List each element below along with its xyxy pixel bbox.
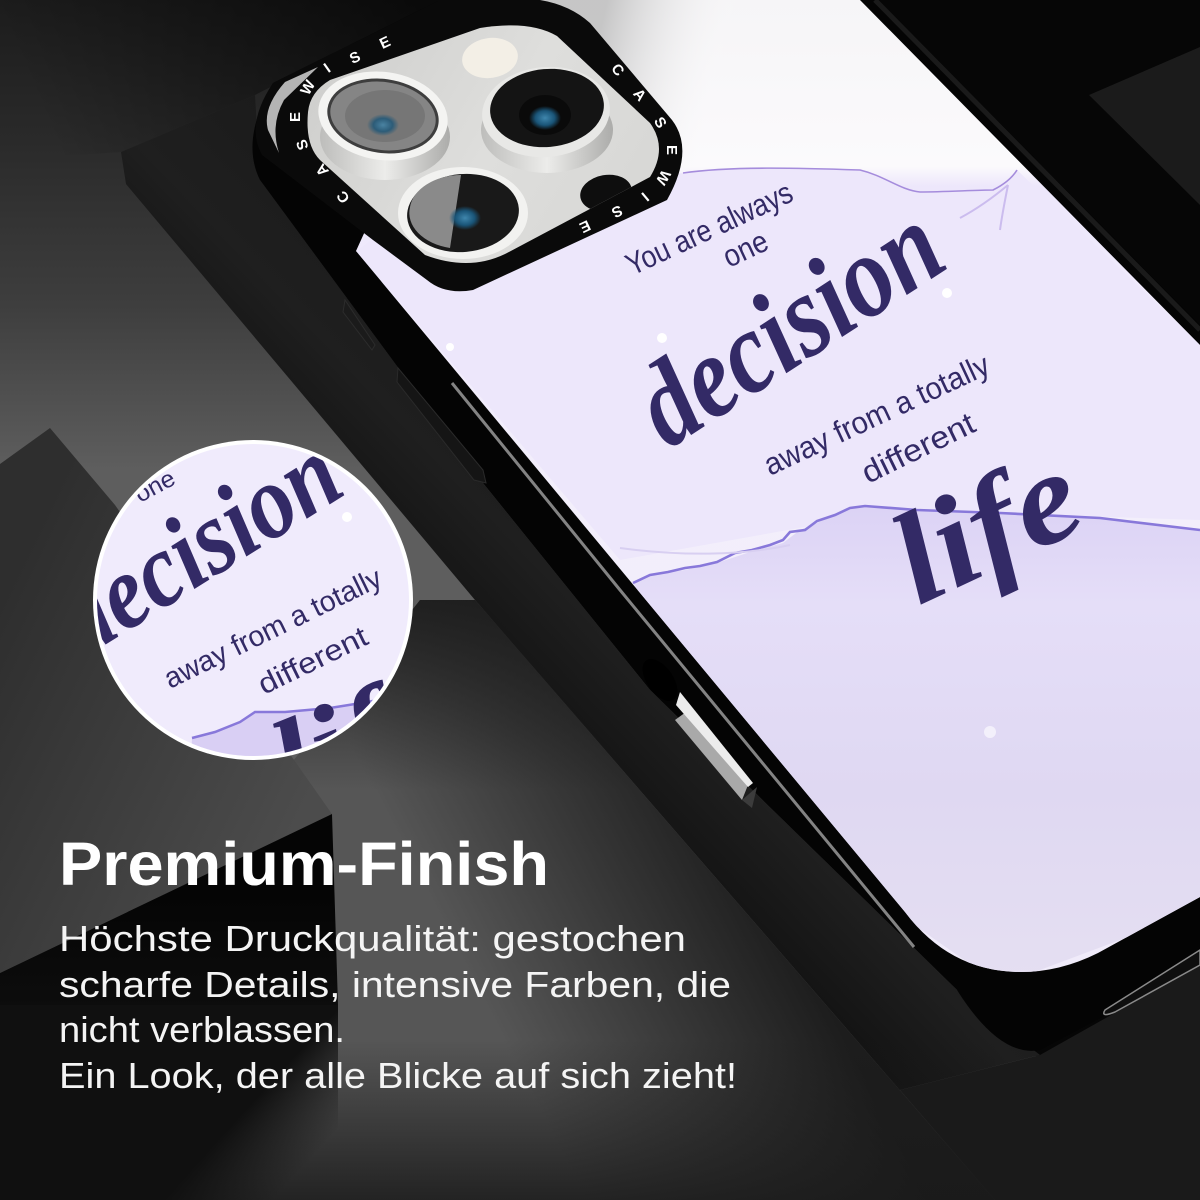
bump brand lettering: W <box>297 77 319 98</box>
lower left block top <box>0 428 332 973</box>
bump silver reflection <box>267 67 318 153</box>
circle text: away from a totally <box>159 562 387 695</box>
bump brand lettering: C <box>333 187 353 206</box>
phone <box>252 0 1200 1051</box>
phone case body <box>252 0 1200 1051</box>
bump brand lettering: S <box>650 114 670 131</box>
zoom detail circle <box>93 440 413 760</box>
bump brand lettering: A <box>629 85 650 105</box>
side switch <box>343 300 375 350</box>
bump brand lettering: C <box>607 60 628 80</box>
charging port <box>1104 950 1200 1015</box>
camera window <box>308 25 659 263</box>
print quote text: one <box>717 223 774 274</box>
paint speckles <box>942 288 952 298</box>
circle marble wash <box>192 700 373 756</box>
bump brand lettering: S <box>609 201 625 221</box>
lens 1 <box>318 72 450 180</box>
bump brand lettering: A <box>312 160 332 179</box>
bump brand lettering: I <box>638 189 652 204</box>
circle text <box>97 456 384 753</box>
right black backdrop <box>800 0 1200 1060</box>
bump brand lettering: W <box>652 167 674 188</box>
bump brand lettering: E <box>377 33 393 53</box>
bump brand lettering: E <box>577 216 593 236</box>
light wedge floor <box>0 600 995 1200</box>
flash <box>462 38 518 78</box>
microphone cutout <box>580 174 632 209</box>
bottom right floor <box>900 965 1200 1200</box>
lower left block shadow <box>0 814 338 1005</box>
body text: Ein Look, der alle Blicke auf sich zieht! <box>59 1055 737 1096</box>
body text: scharfe Details, intensive Farben, die <box>59 964 731 1005</box>
central dark block <box>121 95 1040 1200</box>
side button: silver <box>636 653 757 808</box>
case edge highlight <box>452 383 914 947</box>
print quote text: away from a totally <box>758 347 995 482</box>
lens 2 <box>478 62 614 173</box>
camera bump <box>256 0 682 291</box>
upper marble wash <box>356 169 1200 345</box>
print quote text <box>611 175 1102 632</box>
body text: nicht verblassen. <box>59 1009 345 1050</box>
print-side case rim right <box>875 0 1200 330</box>
printed back <box>356 0 1200 985</box>
bump brand lettering: E <box>287 112 304 122</box>
bump brand lettering <box>287 33 680 236</box>
bump brand lettering: E <box>663 145 680 155</box>
circle text: decision <box>34 413 361 678</box>
body text: Höchste Druckqualität: gestochen <box>59 918 686 959</box>
circle text: life <box>252 639 469 830</box>
circle text: one <box>130 465 180 508</box>
bump brand lettering: I <box>321 60 334 76</box>
bump brand lettering: S <box>347 48 363 68</box>
volume button: side slot <box>397 368 486 483</box>
circle text: different <box>253 621 373 701</box>
heading: Premium-Finish <box>59 830 549 898</box>
print quote text: different <box>856 405 981 490</box>
bump brand lettering: S <box>293 137 312 152</box>
body text <box>59 918 737 1096</box>
upper right block <box>1089 47 1200 205</box>
lens 3 <box>398 167 528 259</box>
print quote text: decision <box>611 178 966 472</box>
print quote text: You are always <box>620 175 798 282</box>
lower marble wash <box>633 507 1200 985</box>
print quote text: life <box>869 421 1102 632</box>
